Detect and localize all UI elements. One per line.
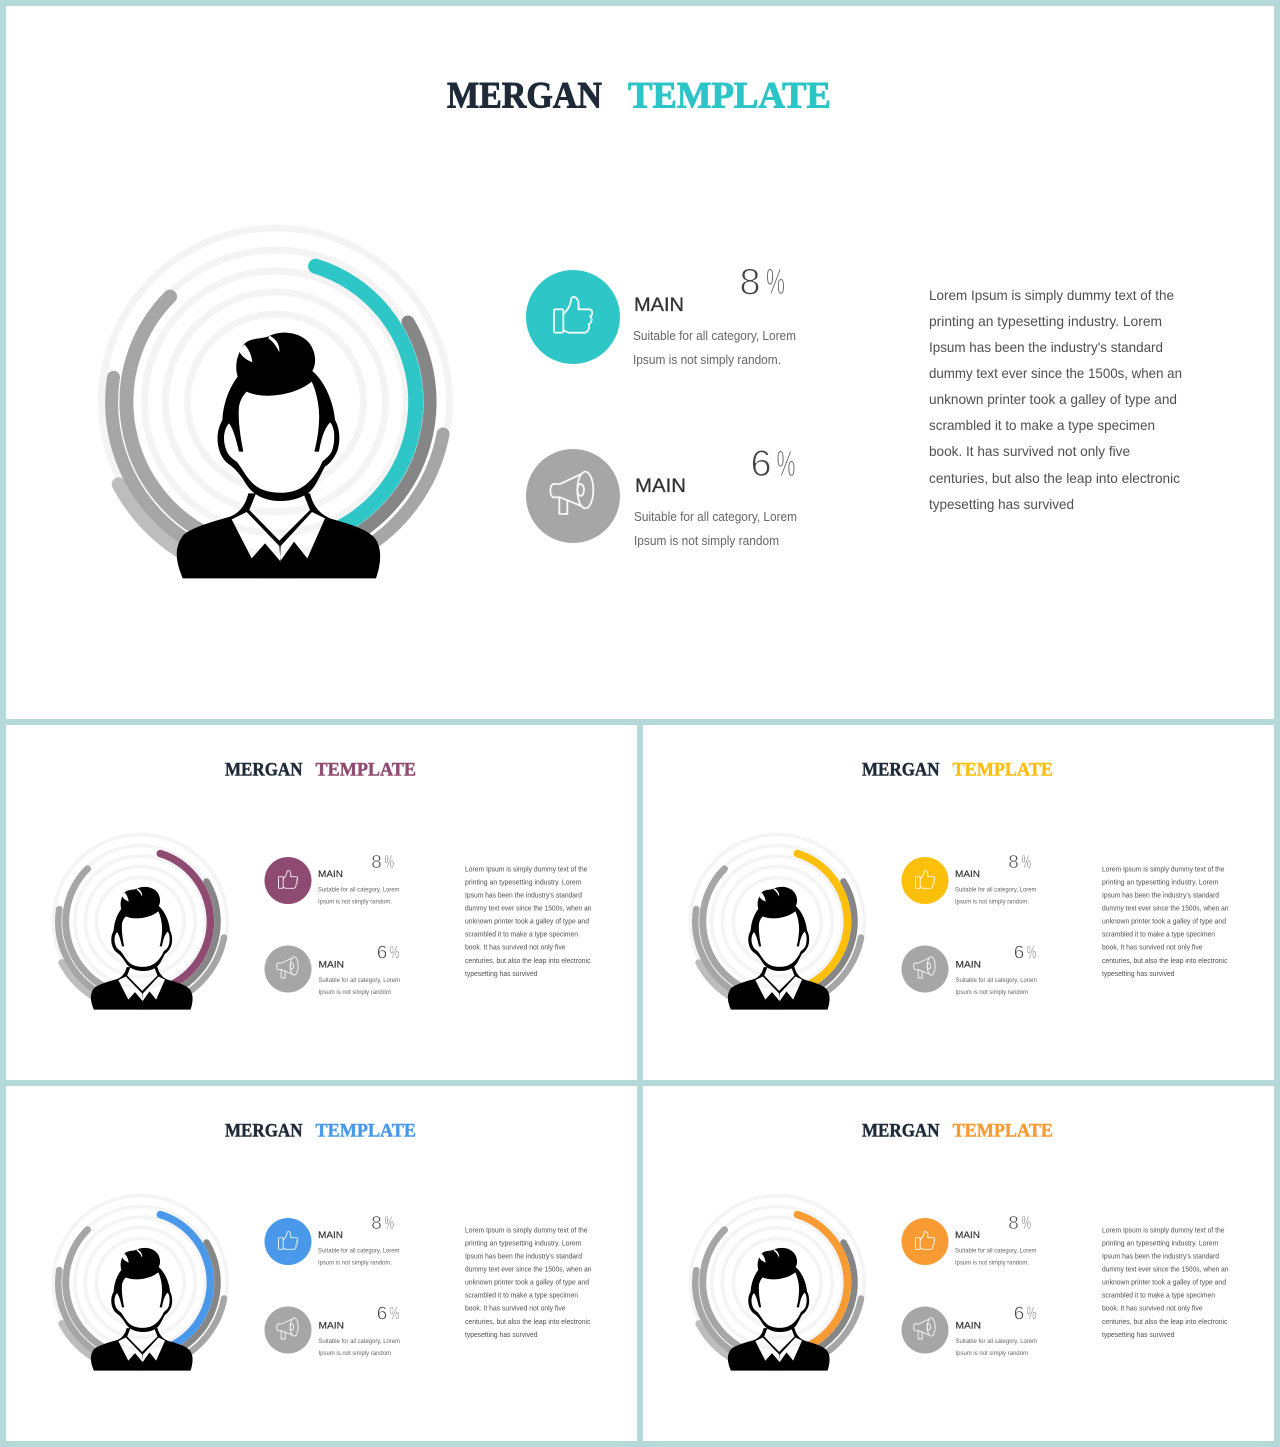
text block: description bbox=[465, 866, 592, 978]
text block: description: printing an typesetting industry. Lorem bbox=[929, 313, 1162, 329]
text block: description: dummy text ever since the 1500s, when an bbox=[1102, 1266, 1229, 1274]
text block: second metric: MAIN bbox=[956, 960, 981, 970]
text block: description: centuries, but also the leap into electronic bbox=[1102, 1319, 1228, 1326]
text block: first metric: 8 bbox=[1008, 851, 1019, 872]
text block: description: centuries, but also the leap into electronic bbox=[465, 958, 591, 965]
text block: description: dummy text ever since the 1500s, when an bbox=[929, 365, 1182, 381]
chart: concentric progress rings bbox=[53, 1196, 227, 1370]
text block: first metric: 8 bbox=[1008, 1212, 1019, 1233]
text block: second metric bbox=[318, 1302, 400, 1357]
text block: description: Lorem Ipsum is simply dummy text of the bbox=[929, 287, 1174, 303]
text block: description: book. It has survived not only five bbox=[465, 944, 566, 952]
text block: second metric: 6 bbox=[750, 443, 772, 484]
icon: thumbs up badge bbox=[526, 270, 620, 364]
text block: second metric bbox=[956, 942, 1037, 996]
text block: description: typesetting has survived bbox=[1102, 1332, 1175, 1339]
text block: first metric: MAIN bbox=[955, 869, 980, 880]
text block: first metric bbox=[318, 1212, 400, 1266]
icon: thumbs up badge bbox=[902, 1218, 948, 1265]
text block: first metric: Suitable for all category, Lorem bbox=[955, 886, 1036, 894]
title: TEMPLATE bbox=[316, 1121, 416, 1141]
text block: first metric bbox=[955, 1212, 1036, 1266]
icon: person avatar bbox=[91, 887, 193, 1010]
panel: large teal slide bbox=[6, 6, 1274, 719]
text block: first metric: 8 bbox=[371, 851, 382, 872]
text block: first metric: % bbox=[384, 852, 394, 872]
icon: thumbs up badge bbox=[264, 1218, 312, 1265]
panel: orange slide bbox=[643, 1086, 1274, 1441]
text block: first metric bbox=[318, 851, 400, 906]
text block: description: scrambled it to make a type specimen bbox=[1102, 1292, 1215, 1300]
text block: description: scrambled it to make a type specimen bbox=[1102, 932, 1215, 938]
text block: description: unknown printer took a galley of type and bbox=[929, 391, 1177, 407]
panel: blue slide bbox=[6, 1086, 637, 1441]
text block: description: Lorem Ipsum is simply dummy text of the bbox=[1102, 866, 1225, 874]
text block: description: book. It has survived not only five bbox=[465, 1306, 566, 1312]
text block: first metric: Ipsum is not simply random. bbox=[955, 1260, 1029, 1266]
text block: description bbox=[1102, 866, 1229, 978]
title bbox=[447, 76, 831, 116]
text block: description: dummy text ever since the 1500s, when an bbox=[1102, 906, 1229, 912]
text block: description: centuries, but also the leap into electronic bbox=[929, 470, 1180, 486]
text block: first metric bbox=[633, 261, 796, 367]
text block: first metric: Suitable for all category, Lorem bbox=[633, 329, 796, 343]
text block: description: printing an typesetting industry. Lorem bbox=[465, 880, 582, 886]
text block: description: Ipsum has been the industry's standard bbox=[1102, 1254, 1219, 1260]
text block: first metric: Ipsum is not simply random. bbox=[318, 1260, 392, 1266]
chart: concentric progress rings bbox=[690, 1196, 864, 1370]
text block: description: Ipsum has been the industry's standard bbox=[465, 1254, 582, 1260]
text block: second metric: Ipsum is not simply random bbox=[318, 1350, 391, 1357]
text block: first metric bbox=[955, 851, 1036, 906]
icon: thumbs up badge bbox=[902, 857, 948, 904]
title: MERGAN bbox=[862, 760, 940, 780]
text block: description: Ipsum has been the industry's standard bbox=[929, 339, 1163, 355]
text block: description: printing an typesetting industry. Lorem bbox=[1102, 880, 1219, 886]
text block: description: typesetting has survived bbox=[929, 496, 1074, 512]
title bbox=[862, 760, 1053, 780]
text block: description: printing an typesetting industry. Lorem bbox=[1102, 1240, 1219, 1248]
text block: description: centuries, but also the leap into electronic bbox=[1102, 958, 1228, 965]
icon: person avatar bbox=[728, 887, 830, 1010]
text block: description bbox=[929, 287, 1182, 512]
text block: first metric: MAIN bbox=[318, 869, 343, 880]
title: TEMPLATE bbox=[628, 76, 831, 116]
text block: first metric: % bbox=[1022, 852, 1031, 872]
text block: description: Lorem Ipsum is simply dummy text of the bbox=[465, 1228, 588, 1234]
text block: first metric: Suitable for all category, Lorem bbox=[318, 886, 400, 894]
text block: first metric: Ipsum is not simply random. bbox=[955, 898, 1029, 906]
text block: second metric: % bbox=[776, 443, 796, 484]
text block: second metric: Suitable for all category, Lorem bbox=[318, 977, 400, 984]
text block: first metric: Ipsum is not simply random. bbox=[318, 898, 392, 906]
text block: description: typesetting has survived bbox=[1102, 971, 1175, 978]
text block: description: book. It has survived not only five bbox=[929, 443, 1130, 459]
text block: description: centuries, but also the leap into electronic bbox=[465, 1319, 591, 1326]
title: TEMPLATE bbox=[316, 760, 416, 780]
text block: description: Lorem Ipsum is simply dummy text of the bbox=[1102, 1228, 1225, 1234]
text block: description: book. It has survived not only five bbox=[1102, 944, 1203, 952]
title bbox=[225, 1121, 416, 1141]
text block: second metric: Suitable for all category, Lorem bbox=[318, 1338, 400, 1345]
text block: second metric: % bbox=[390, 1304, 399, 1324]
text block: description: Ipsum has been the industry's standard bbox=[1102, 892, 1219, 900]
text block: second metric bbox=[956, 1302, 1037, 1357]
text block: first metric: % bbox=[1022, 1213, 1031, 1233]
text block: description bbox=[465, 1228, 592, 1339]
text block: first metric: MAIN bbox=[318, 1230, 343, 1241]
text block: first metric: MAIN bbox=[634, 295, 684, 316]
icon: megaphone badge bbox=[902, 1306, 948, 1354]
text block: second metric: % bbox=[390, 942, 399, 962]
title: MERGAN bbox=[225, 1121, 303, 1141]
text block: description: unknown printer took a galley of type and bbox=[1102, 918, 1226, 926]
text block: first metric: % bbox=[766, 261, 785, 302]
text block: first metric: MAIN bbox=[955, 1230, 980, 1241]
text block: second metric bbox=[318, 942, 400, 996]
text block: description: unknown printer took a galley of type and bbox=[465, 918, 589, 926]
text block: second metric: 6 bbox=[1014, 942, 1024, 962]
chart: concentric progress rings bbox=[53, 834, 227, 1008]
text block: second metric: 6 bbox=[1014, 1302, 1024, 1324]
text block: description: scrambled it to make a type specimen bbox=[465, 932, 578, 938]
text block: description: typesetting has survived bbox=[465, 971, 538, 978]
text block: first metric: 8 bbox=[371, 1212, 382, 1233]
icon: thumbs up badge bbox=[264, 857, 312, 904]
title: MERGAN bbox=[447, 76, 602, 116]
text block: first metric: 8 bbox=[740, 262, 760, 302]
title: MERGAN bbox=[225, 760, 303, 780]
text block: first metric: Suitable for all category, Lorem bbox=[318, 1248, 400, 1254]
title: TEMPLATE bbox=[952, 1121, 1053, 1141]
text block: second metric: Suitable for all category, Lorem bbox=[634, 510, 797, 524]
title: TEMPLATE bbox=[952, 760, 1053, 780]
text block: description: book. It has survived not only five bbox=[1102, 1306, 1203, 1312]
text block: first metric: Ipsum is not simply random. bbox=[633, 353, 781, 367]
text block: second metric: Ipsum is not simply random bbox=[956, 989, 1028, 996]
text block: second metric: Suitable for all category, Lorem bbox=[956, 1338, 1037, 1345]
text block: description: dummy text ever since the 1500s, when an bbox=[465, 906, 592, 912]
text block: second metric: 6 bbox=[377, 942, 387, 962]
text block: second metric: Ipsum is not simply random bbox=[634, 534, 779, 548]
text block: second metric: MAIN bbox=[635, 476, 686, 497]
icon: person avatar bbox=[91, 1248, 193, 1371]
text block: description: scrambled it to make a type specimen bbox=[465, 1292, 578, 1300]
chart: concentric progress rings bbox=[102, 228, 450, 576]
chart: concentric progress rings bbox=[690, 834, 864, 1008]
text block: second metric: Ipsum is not simply random bbox=[956, 1350, 1028, 1357]
icon: megaphone badge bbox=[264, 1306, 312, 1354]
text block: first metric: Suitable for all category, Lorem bbox=[955, 1248, 1036, 1254]
icon: person avatar bbox=[728, 1248, 830, 1371]
text block: second metric: MAIN bbox=[318, 960, 344, 970]
panel: plum slide bbox=[6, 725, 637, 1080]
text block: description: scrambled it to make a type specimen bbox=[929, 417, 1155, 433]
text block: description bbox=[1102, 1228, 1229, 1339]
text block: description: Lorem Ipsum is simply dummy text of the bbox=[465, 866, 588, 874]
text block: description: dummy text ever since the 1500s, when an bbox=[465, 1266, 592, 1274]
text block: second metric: % bbox=[1027, 942, 1036, 962]
icon: person avatar bbox=[177, 333, 380, 578]
title bbox=[225, 760, 416, 780]
title: MERGAN bbox=[862, 1121, 940, 1141]
panel: yellow slide bbox=[643, 725, 1274, 1080]
text block: second metric: 6 bbox=[377, 1302, 387, 1324]
icon: megaphone badge bbox=[264, 946, 312, 992]
text block: description: unknown printer took a galley of type and bbox=[465, 1280, 589, 1286]
text block: second metric: Suitable for all category, Lorem bbox=[956, 977, 1037, 984]
text block: second metric: Ipsum is not simply random bbox=[318, 989, 391, 996]
text block: description: printing an typesetting industry. Lorem bbox=[465, 1240, 582, 1248]
text block: second metric: MAIN bbox=[956, 1320, 981, 1332]
text block: second metric: MAIN bbox=[318, 1320, 344, 1332]
text block: description: unknown printer took a galley of type and bbox=[1102, 1280, 1226, 1286]
icon: megaphone badge bbox=[902, 946, 948, 992]
text block: first metric: % bbox=[384, 1213, 394, 1233]
title bbox=[862, 1121, 1053, 1141]
text block: description: typesetting has survived bbox=[465, 1332, 538, 1339]
icon: megaphone badge bbox=[526, 449, 620, 543]
text block: description: Ipsum has been the industry's standard bbox=[465, 892, 582, 900]
text block: second metric: % bbox=[1027, 1304, 1036, 1324]
text block: second metric bbox=[634, 443, 797, 548]
